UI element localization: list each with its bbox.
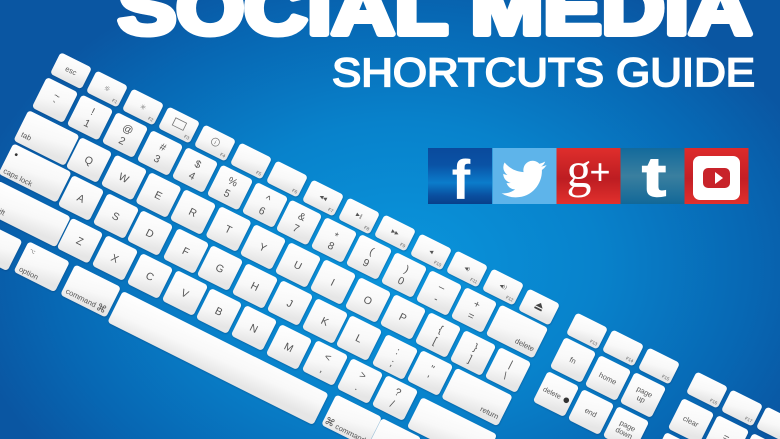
key row: function keys: F11 <box>469 277 479 285</box>
key row: qwerty: I <box>329 277 337 289</box>
key row: bottom row: option <box>18 264 40 282</box>
key row: shift row: B <box>213 305 224 319</box>
key cluster: numeric pad: F17 <box>744 416 754 424</box>
icon: youtube <box>684 148 748 204</box>
key row: function keys: ◀) <box>463 265 471 273</box>
subtitle: SHORTCUTS GUIDE <box>332 51 755 95</box>
key cluster: navigation: F15 <box>661 374 671 382</box>
key row: numbers: ! <box>89 106 97 118</box>
key row: function keys: F6 <box>291 188 299 195</box>
key row: bottom row <box>0 223 421 439</box>
key row: function keys: F9 <box>399 242 407 249</box>
key cluster: navigation: fn <box>568 355 578 366</box>
icon: facebook: f <box>452 148 471 211</box>
key row: numbers: – <box>436 281 447 294</box>
key cluster: navigation <box>533 312 680 439</box>
key row: shift row: X <box>109 252 120 266</box>
key row: numbers: ~ <box>51 90 62 103</box>
key row: qwerty: Y <box>257 241 268 255</box>
key row: qwerty: } <box>471 341 480 354</box>
key row: home row: S <box>110 210 121 224</box>
key row: numbers: $ <box>192 158 203 171</box>
key row: numbers: 3 <box>152 153 162 166</box>
key row: shift row <box>0 181 497 439</box>
key row: shift row: . <box>353 381 361 393</box>
key cluster: navigation: end <box>583 406 598 419</box>
key row: function keys: F7 <box>327 207 335 214</box>
key row: numbers: 5 <box>222 187 232 201</box>
key row: home row: caps lock <box>2 166 34 188</box>
key row: shift row: M <box>282 341 295 355</box>
key row: numbers: # <box>157 141 168 154</box>
key row: qwerty: R <box>186 206 199 220</box>
icon: google plus: g <box>566 142 592 198</box>
key row: function keys: F2 <box>147 116 155 123</box>
key row: shift row: < <box>322 351 333 364</box>
key row: bottom row: ⌥ <box>28 248 36 256</box>
key row: numbers: 2 <box>117 135 127 148</box>
key row: qwerty: T <box>222 223 234 237</box>
key row: shift row: , <box>318 363 326 375</box>
key row: qwerty: \ <box>501 370 509 382</box>
key row: numbers: 4 <box>187 170 197 183</box>
icon: tumblr: t <box>642 145 666 208</box>
key row: shift row: C <box>143 270 156 284</box>
key row: home row: G <box>213 262 226 276</box>
key row: bottom row: command <box>64 287 98 309</box>
key row: qwerty: ] <box>466 353 474 365</box>
icon: facebook <box>428 148 492 211</box>
key row: function keys: esc <box>64 64 78 77</box>
key row: qwerty: U <box>291 259 304 273</box>
key row: bottom row: ⌘ <box>323 416 336 430</box>
key row: function keys: ☼ <box>102 84 112 94</box>
key row: function keys: F1 <box>111 98 119 105</box>
key row: qwerty: Q <box>82 154 95 168</box>
key row: function keys: ◀)) <box>498 283 508 291</box>
key row: qwerty: P <box>397 311 408 325</box>
key row: home row: ; <box>388 357 396 369</box>
key row: qwerty: tab <box>20 130 33 143</box>
icon: google plus <box>556 142 620 204</box>
key cluster: numeric pad <box>651 371 780 439</box>
key row: qwerty: O <box>361 294 374 308</box>
key row: numbers: = <box>465 310 476 323</box>
key row: numbers: 8 <box>326 240 336 253</box>
key row: qwerty: { <box>436 323 445 336</box>
key row: numbers: 9 <box>361 257 371 270</box>
key row: function keys: F12 <box>505 295 515 303</box>
icon: google plus: + <box>589 151 611 192</box>
key row: numbers: delete <box>513 336 536 353</box>
key row: qwerty: W <box>116 171 131 186</box>
key row: shift row: ? <box>392 386 403 399</box>
key cluster: numeric pad: clear <box>681 414 701 429</box>
icon: tumblr <box>620 145 684 208</box>
key row: numbers: ` <box>48 99 57 112</box>
key row: numbers: 7 <box>291 222 301 236</box>
key row: home row: D <box>143 227 156 241</box>
key row: home row: : <box>394 346 402 358</box>
key row: function keys: F4 <box>219 152 227 159</box>
key row: home row <box>0 143 513 426</box>
key row: function keys: ◀ <box>428 248 434 256</box>
key row: home row: J <box>285 297 295 310</box>
key row: shift row: Z <box>74 235 86 249</box>
key row: function keys: F10 <box>433 260 443 268</box>
key row: home row: L <box>353 332 364 346</box>
key row: function keys <box>50 52 560 326</box>
key row: home row: return <box>479 404 500 421</box>
key cluster: numeric pad: F16 <box>709 398 719 406</box>
key row: home row: H <box>248 280 261 294</box>
key row: numbers: ^ <box>263 193 273 206</box>
key row: numbers: 0 <box>396 275 406 288</box>
key row: function keys: i <box>213 140 217 146</box>
key row: function keys: F5 <box>255 170 263 177</box>
key row: function keys: ▶‖ <box>355 212 363 220</box>
key row: qwerty: [ <box>431 335 439 347</box>
key row: function keys: F3 <box>183 134 191 141</box>
key row: qwerty: | <box>507 359 515 371</box>
key row: numbers: ( <box>367 245 376 258</box>
key row: numbers <box>32 77 548 359</box>
key row: home row: A <box>75 192 86 206</box>
key cluster: navigation: page <box>618 418 637 434</box>
key row: bottom row: ⌘ <box>94 302 108 316</box>
key row: numbers: 6 <box>257 205 267 218</box>
key row: qwerty: E <box>152 189 164 203</box>
key row: qwerty <box>13 110 531 393</box>
key cluster: navigation: delete <box>542 386 562 401</box>
key row: numbers: * <box>331 230 340 243</box>
key row: numbers: 1 <box>82 117 92 131</box>
key row: numbers: & <box>296 210 308 224</box>
key cluster: navigation: F14 <box>625 356 635 364</box>
key row: home row: " <box>427 363 436 376</box>
key row: shift row: N <box>247 322 260 336</box>
icon: twitter <box>492 148 556 204</box>
key cluster: navigation: up <box>635 393 647 405</box>
key row: shift row: V <box>179 287 190 301</box>
key cluster: navigation: page <box>635 384 654 400</box>
key cluster: navigation: home <box>597 370 618 387</box>
key row: home row: ' <box>423 373 430 385</box>
key row: home row: K <box>319 315 330 329</box>
key row: function keys: F8 <box>363 225 371 232</box>
key row: home row: F <box>180 245 191 259</box>
key row: numbers: % <box>226 175 240 190</box>
key row: numbers: + <box>471 298 482 311</box>
key row: shift row: > <box>357 369 368 382</box>
social media icons <box>428 142 748 211</box>
key row: function keys: ◀◀ <box>318 194 328 202</box>
key row: numbers: ) <box>402 263 411 276</box>
key cluster: navigation: F13 <box>589 339 599 347</box>
key row: function keys: ☼ <box>138 102 147 112</box>
key row: numbers: - <box>432 293 441 306</box>
key row: shift row: / <box>388 398 396 410</box>
key row: function keys: ▶▶ <box>390 229 400 237</box>
key row: numbers: @ <box>120 122 135 137</box>
